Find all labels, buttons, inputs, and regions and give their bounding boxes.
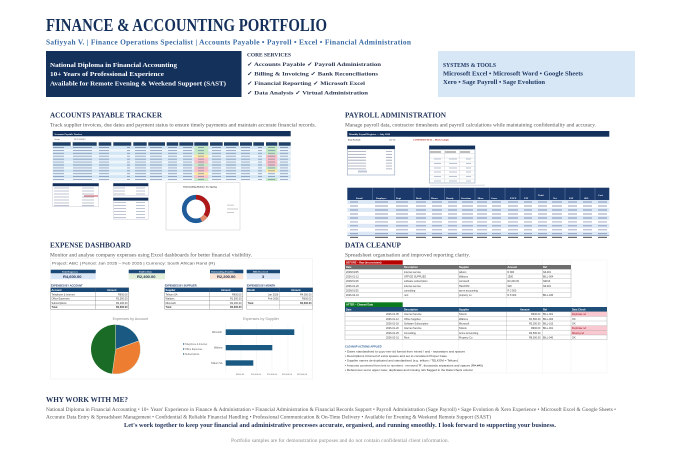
- table: payroll register: Employee: [376, 197, 387, 200]
- tile: outstanding payables: [210, 270, 243, 279]
- table: after cleaned data: Software Subscription: [404, 322, 429, 326]
- chart: expenses by account pie: Telephone & Internet: [185, 343, 207, 346]
- text: cleanup actions applied: • References set to upper case; duplicates and missing refs flagged in the Data Check column: [345, 369, 474, 372]
- table: expenses by supplier: R900.00: [232, 293, 242, 296]
- table: after cleaned data: Description: [404, 308, 418, 311]
- table: expenses by month: Feb 2026: [268, 298, 279, 301]
- table: after cleaned data: Duplicate ref: [572, 313, 586, 316]
- chart: outstanding balance donut: [166, 183, 240, 230]
- panel: payroll spreadsheet: [347, 131, 609, 237]
- table: before raw data: 2026-01-20: [346, 285, 359, 288]
- table: before raw data: BILL-004: [543, 276, 554, 278]
- table: after cleaned data: Waltons: [459, 318, 469, 321]
- panel: core services: ✓ Billing & Invoicing ✓ Bank Reconciliations: [247, 72, 379, 78]
- panel: core services: ✓ Data Analysis ✓ Virtual Administration: [247, 90, 369, 96]
- table: before raw data: OFFICE SUPPLIES: [404, 276, 426, 278]
- table: before raw data: internet service: [404, 285, 422, 288]
- heading: why work with me: WHY WORK WITH ME?: [46, 395, 128, 404]
- text: project details: Project: ABC | Period: Jan 2026 – Feb 2026 | Currency: South African Rand (R): [52, 262, 216, 266]
- table: before raw data: 2026-01-12: [346, 276, 359, 278]
- panel: expense dashboard spreadsheet: [50, 258, 313, 379]
- table: expenses by supplier: Amount: [221, 289, 231, 292]
- text: cleanup actions applied: [345, 344, 483, 372]
- table: before raw data: Waltons: [459, 276, 469, 278]
- tile: outstanding payables: R2,200.00: [217, 274, 236, 279]
- table: before raw data: property co: [459, 294, 472, 297]
- table: before raw data: R 8 000: [508, 294, 517, 297]
- table: before raw data: R 2 500: [508, 290, 517, 292]
- chart: expenses by supplier bars: Expenses by Supplier: [243, 317, 280, 321]
- table: after cleaned data: R2,500.00: [529, 332, 541, 335]
- table: payroll register: Allow.: [477, 197, 484, 200]
- panel: core services: ✓ Financial Reporting ✓ Microsoft Excel: [247, 81, 366, 87]
- table: expenses by month: [247, 284, 313, 309]
- heading: accounts payable tracker: ACCOUNTS PAYABLE TRACKER: [50, 110, 162, 120]
- table: before raw data: internet service: [404, 271, 422, 274]
- table: expenses by account: R4,600.00: [116, 306, 128, 309]
- tile: total expenses: [51, 270, 96, 279]
- chart: expenses by supplier bars: Waltons: [214, 346, 223, 350]
- table: after cleaned data: R1,500.00: [529, 318, 541, 321]
- table: after cleaned data: OK: [572, 336, 576, 340]
- text: why work with me details: National Diploma in Financial Accounting • 10+ Years' Experience in Finance & Administration • Financial Administration & Financial Records Support • Payroll Administration (Sage Payroll) • Sage Evolution & Xero Experience • Microsoft Excel & Google Sheets •: [46, 408, 616, 413]
- panel: core services: [247, 52, 382, 96]
- tile: paid to date: Paid to Date: [139, 271, 153, 274]
- chart: expenses by supplier bars: R1,000.00: [251, 374, 262, 376]
- text: cleanup actions applied: CLEANUP ACTIONS APPLIED: [345, 344, 382, 348]
- table: after cleaned data: 2026-01-18: [386, 322, 399, 326]
- table: after cleaned data: BILL-013: [543, 322, 554, 326]
- chart: expenses by supplier bars: R2,500.00: [297, 374, 308, 376]
- table: after cleaned data: Rent: [404, 336, 410, 340]
- table: payroll register: UIF: [569, 197, 574, 200]
- chart: expenses by account pie: Subscriptions: [185, 353, 200, 356]
- table: after cleaned data: Ref: [543, 308, 547, 311]
- panel: systems and tools: SYSTEMS & TOOLS: [443, 63, 496, 69]
- title: FINANCE & ACCOUNTING PORTFOLIO: [46, 15, 327, 35]
- table: after cleaned data: R2,200.00: [529, 322, 541, 326]
- table: expenses by supplier: Waltons: [166, 298, 175, 301]
- chart: outstanding balance donut: Outstanding Balance by Ageing: [183, 186, 217, 188]
- table: after cleaned data: Microsoft: [459, 322, 469, 326]
- table: after cleaned data: Internet Service: [404, 313, 422, 316]
- chart: expenses by account pie: Office Expenses: [185, 348, 203, 351]
- text: cleanup actions applied: • Amounts converted from text to numbers - removed 'R', thousands separators and spaces (R#,##0): [345, 364, 483, 367]
- table: after cleaned data: Data Check: [572, 308, 586, 311]
- table: expenses by supplier: Supplier: [166, 289, 176, 292]
- table: before raw data: 2026/01/05: [346, 271, 359, 274]
- text: call to action: Let's work together to keep your financial and administrative processes accurate, organised, and running smoothly. I look forward to supporting your business.: [124, 423, 557, 429]
- chart: expenses by supplier bars: Microsoft: [212, 331, 222, 334]
- table: expenses by supplier: Total: [166, 306, 172, 309]
- table: expenses by month: Jan 2026: [268, 293, 279, 296]
- table: after cleaned data: R8,000.00: [529, 336, 541, 340]
- table: payroll register: UIF: [524, 197, 529, 200]
- text: cleanup actions applied: • Dates standardised to yyyy-mm-dd format from mixed / and - separators and spaces: [345, 350, 466, 353]
- panel: payroll spreadsheet: CONFIDENTIAL – Mock/sample: [413, 138, 450, 142]
- table: expenses by supplier: R1,500.00: [230, 298, 242, 301]
- panel: qualifications: Available for Remote Evening & Weekend Support (SAST): [50, 80, 226, 88]
- table: after cleaned data: Date: [346, 308, 352, 311]
- table: before raw data: microsoft: [459, 280, 469, 283]
- table: payroll register: SDL: [584, 197, 589, 200]
- table: tax brackets: [429, 146, 475, 183]
- table: after cleaned data: Internet Service: [404, 327, 422, 330]
- tile: bills received: Bills Received: [253, 271, 269, 274]
- table: expenses by supplier: R4,600.00: [230, 306, 242, 309]
- text: expense description: Monitor and analyse company expenses using Excel dashboards for better financial visibility.: [50, 252, 252, 258]
- table: invoices: [53, 142, 291, 181]
- chart: expenses by supplier bars: Telkom SA: [211, 362, 223, 365]
- table: payroll register: Net: [553, 197, 557, 200]
- text: why work with me details: Accurate Data Entry & Spreadsheet Management • Confidential & Reliable Financial Handling • Professional Communication & On-Time Delivery • Available for Evening & Weekend Remote Support (SAST): [46, 415, 491, 420]
- table: before raw data: [345, 260, 571, 297]
- table: expenses by account: Telephone & Internet: [52, 293, 75, 296]
- table: before raw data: Supplier: [459, 266, 469, 269]
- panel: accounts payable spreadsheet: [53, 131, 291, 230]
- table: before raw data: bill013: [543, 280, 551, 283]
- panel: payroll spreadsheet: Pay Period:: [348, 138, 361, 142]
- chart: expenses by account pie: [91, 317, 207, 374]
- table: after cleaned data: BILL-001: [543, 327, 554, 330]
- tile: bills received: [247, 270, 280, 279]
- heading: payroll administration: PAYROLL ADMINISTRATION: [345, 110, 446, 120]
- table: before raw data: R 900: [508, 271, 515, 274]
- table: expenses by month: R4,000.00: [300, 293, 312, 296]
- table: before raw data: Amount: [508, 266, 517, 269]
- text: payroll description: Manage payroll data, contractor timesheets and payroll calculations while maintaining confidentiality and accuracy.: [345, 122, 596, 128]
- table: after cleaned data: OK: [572, 318, 576, 321]
- table: before raw data: 2026-02-01: [346, 294, 359, 297]
- text: why work with me details: [46, 408, 616, 420]
- table: before raw data: Description: [404, 266, 418, 269]
- table: expenses by month: R600.00: [302, 298, 312, 301]
- table: expenses by supplier: [165, 284, 243, 309]
- panel: systems and tools: Xero • Sage Payroll • Sage Evolution: [443, 80, 546, 86]
- text: cleanup actions applied: • Descriptions trimmed of extra spaces and set to consistent Proper Case: [345, 355, 448, 358]
- table: before raw data: bill-001: [543, 271, 552, 274]
- table: payroll register: Hourly: [446, 197, 454, 200]
- table: before raw data: telkom: [459, 271, 466, 274]
- table: after cleaned data: BILL-004: [543, 318, 554, 321]
- panel: systems and tools: [438, 51, 635, 97]
- table: after cleaned data: 2026-01-20: [386, 327, 399, 330]
- text: accounts payable description: Track supplier invoices, due dates and payment status to ensure timely payments and maintain accurate financial records.: [50, 122, 316, 128]
- chart: expenses by supplier bars: R500.00: [236, 374, 245, 376]
- table: expenses by account: EXPENSES BY ACCOUNT: [51, 284, 83, 288]
- text: disclaimer: Portfolio samples are for demonstration purposes and do not contain confidential client information.: [231, 439, 449, 444]
- subtitle: Safiyyah V. | Finance Operations Specialist | Accounts Payable • Payroll • Excel • Financial Administration: [46, 38, 411, 46]
- chart: expenses by supplier bars: R1,500.00: [267, 374, 278, 376]
- table: before raw data: consulting: [404, 290, 416, 292]
- table: after cleaned data: Acme Accounting: [459, 332, 479, 335]
- panel: accounts payable spreadsheet: Accounts Payable Tracker: [54, 133, 83, 136]
- table: after cleaned data: BILL-040: [543, 336, 554, 340]
- table: payroll register: [347, 188, 609, 237]
- table: payroll assumptions: [347, 146, 395, 175]
- table: after cleaned data: 2026-01-12: [386, 318, 399, 321]
- text: data cleanup description: Spreadsheet organisation and improved reporting clarity.: [345, 252, 470, 258]
- table: expenses by account: R2,200.00: [116, 302, 128, 305]
- table: expenses by account: Subscriptions: [52, 302, 67, 305]
- table: payable by status: [113, 183, 148, 196]
- table: before raw data: acme accounting: [459, 290, 479, 292]
- table: after cleaned data: Telkom: [459, 313, 467, 316]
- panel: data cleanup spreadsheet: [345, 260, 607, 373]
- table: after cleaned data: Office Supplies: [404, 318, 422, 321]
- tile: outstanding payables: Outstanding Payables: [211, 271, 234, 274]
- panel: core services: ✓ Accounts Payable ✓ Payroll Administration: [247, 62, 382, 68]
- panel: accounts payable spreadsheet: 31/12/2025: [74, 138, 86, 141]
- table: after cleaned data: Telkom: [459, 327, 467, 330]
- table: expenses by account: R1,500.00: [116, 298, 128, 301]
- table: expenses by supplier: EXPENSES BY SUPPLIER: [165, 284, 197, 288]
- table: before raw data: software subscription: [404, 280, 428, 283]
- table: expenses by account: R900.00: [118, 293, 128, 296]
- table: before raw data: TELKOM: [459, 285, 469, 288]
- table: after cleaned data: 2026-02-01: [386, 336, 399, 340]
- table: expenses by supplier: Microsoft: [166, 302, 176, 305]
- table: after cleaned data: 2026-01-25: [386, 332, 399, 335]
- text: cleanup actions applied: • Supplier names de-duplicated and standardised (e.g. telkom / TELKOM = Telkom): [345, 360, 458, 363]
- table: after cleaned data: Amount: [520, 308, 530, 311]
- table: expenses by account: [51, 284, 129, 309]
- table: after cleaned data: Missing ref: [572, 332, 584, 335]
- table: expenses by account: Office Expenses: [52, 298, 70, 301]
- table: after cleaned data: OK: [572, 322, 576, 326]
- table: before raw data: 2026/01/18: [346, 280, 359, 283]
- table: expenses by account: Account: [52, 289, 62, 292]
- table: before raw data: Ref: [543, 266, 547, 269]
- table: after cleaned data: Property Co: [459, 336, 473, 340]
- table: expenses by month: Amount: [291, 289, 301, 292]
- heading: data cleanup: DATA CLEANUP: [345, 240, 401, 250]
- tile: bills received: 3: [262, 274, 265, 279]
- table: after cleaned data: R900.00: [531, 327, 541, 330]
- tile: total expenses: Total Expenses: [62, 271, 78, 274]
- table: expenses by month: Total: [248, 302, 254, 305]
- table: payroll register: Email: [356, 197, 363, 200]
- table: expenses by account: Amount: [107, 289, 117, 292]
- tile: paid to date: R2,400.00: [137, 274, 156, 279]
- table: expenses by month: Month: [248, 289, 255, 292]
- table: after cleaned data: BILL-001: [543, 313, 554, 316]
- table: after cleaned data: 2026-01-05: [386, 313, 399, 316]
- table: payroll register: Total: [538, 194, 544, 197]
- table: before raw data: bill-001: [543, 285, 552, 288]
- panel: qualifications: [46, 51, 242, 97]
- panel: systems and tools: Microsoft Excel • Microsoft Word • Google Sheets: [443, 72, 584, 78]
- table: after cleaned data: Duplicate ref: [572, 327, 586, 330]
- tile: paid to date: [129, 270, 165, 279]
- table: before raw data: 900: [508, 285, 512, 288]
- table: payroll register: Basic: [416, 197, 423, 200]
- table: after cleaned data: AFTER – Cleaned Data: [346, 304, 374, 307]
- table: payroll register: Dept: [396, 197, 401, 200]
- table: after cleaned data: Consulting: [404, 332, 416, 335]
- table: ageing analysis: [113, 198, 148, 219]
- table: after cleaned data: Supplier: [459, 308, 469, 311]
- table: expenses by account: Total: [52, 306, 58, 309]
- panel: payroll spreadsheet: Monthly Payroll Register — July 2026: [349, 133, 391, 136]
- table: expenses by supplier: Telkom SA: [166, 293, 178, 296]
- tile: total expenses: R4,600.00: [63, 274, 82, 279]
- table: payroll register: Hours: [431, 197, 438, 200]
- panel: qualifications: 10+ Years of Professional Experience: [50, 71, 164, 78]
- chart: expenses by supplier bars: [211, 317, 308, 376]
- table: payroll register: Overtime: [461, 197, 472, 200]
- table: payable summary: [53, 183, 99, 207]
- table: before raw data: 2026/01/25: [346, 290, 359, 292]
- chart: expenses by supplier bars: R2,000.00: [282, 374, 293, 376]
- table: expenses by month: EXPENSES BY MONTH: [247, 284, 275, 288]
- table: expenses by month: R4,600.00: [300, 302, 312, 305]
- table: after cleaned data: [345, 302, 607, 340]
- table: after cleaned data: R900.00: [531, 313, 541, 316]
- table: before raw data: rent: [404, 294, 409, 297]
- table: before raw data: R2,200.00: [508, 280, 520, 283]
- panel: core services: CORE SERVICES: [247, 52, 291, 58]
- table: payroll register: Gross: [491, 197, 497, 200]
- panel: accounts payable spreadsheet: As at:: [54, 138, 60, 141]
- chart: expenses by account pie: Expenses by Account: [113, 317, 148, 321]
- table: payroll register: PAYE: [510, 197, 517, 200]
- table: before raw data: Date: [346, 266, 352, 269]
- panel: qualifications: National Diploma in Financial Accounting: [50, 62, 178, 69]
- table: before raw data: BEFORE – Raw (inconsistent): [346, 262, 382, 265]
- heading: expense dashboard: EXPENSE DASHBOARD: [50, 240, 131, 250]
- table: before raw data: BILL-040: [543, 294, 554, 297]
- table: expenses by supplier: R2,200.00: [230, 302, 242, 305]
- panel: payroll spreadsheet: Jul-26: [389, 138, 396, 142]
- table: before raw data: 1500: [508, 276, 514, 278]
- table: payroll register: Cost: [598, 194, 603, 197]
